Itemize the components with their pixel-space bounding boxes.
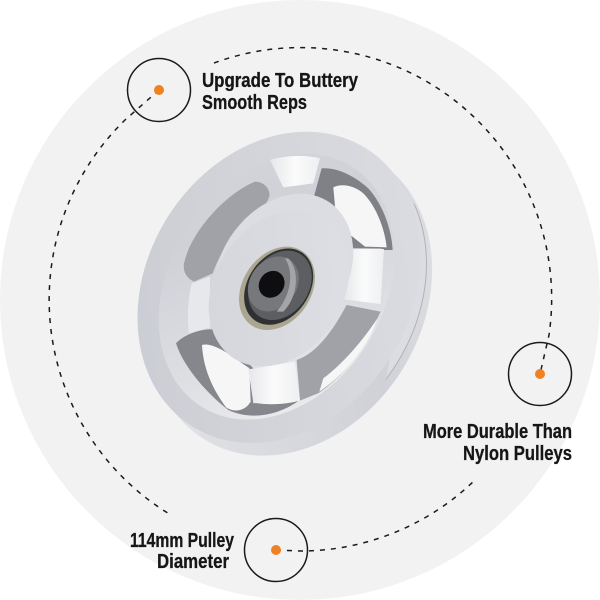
bearing [223,232,331,345]
dashed arc: durability feature [214,48,552,374]
groove edge [386,204,427,380]
callout text: buttery smooth: Smooth Reps [202,92,307,114]
callout text: durable [423,421,572,465]
callout text: diameter: Diameter [157,551,229,573]
callout text: buttery smooth: Upgrade To Buttery [202,70,359,92]
callout text: buttery smooth [202,70,359,114]
callout marker: durable [508,342,572,406]
rim recess [111,110,443,464]
hub face [180,184,378,393]
dashed arc: top feature [49,90,171,515]
back flange of the pulley [92,91,489,509]
callout text: diameter: 114mm Pulley [130,530,235,552]
spokes [188,156,384,404]
upper right window [312,168,393,250]
lower left window [176,329,300,416]
dashed arc: diameter feature [276,480,475,551]
callout text: durable: Nylon Pulleys [463,443,572,465]
lower right recess [297,305,381,401]
hub collar [185,167,382,376]
lower right slit [319,318,377,392]
pulley wheel [138,132,432,456]
callout text: durable: More Durable Than [423,421,572,443]
callout marker: buttery smooth [128,58,190,122]
upper left recess [184,182,269,282]
front rim [80,78,478,496]
callout text: diameter [130,530,235,573]
callout marker: diameter [244,518,308,582]
